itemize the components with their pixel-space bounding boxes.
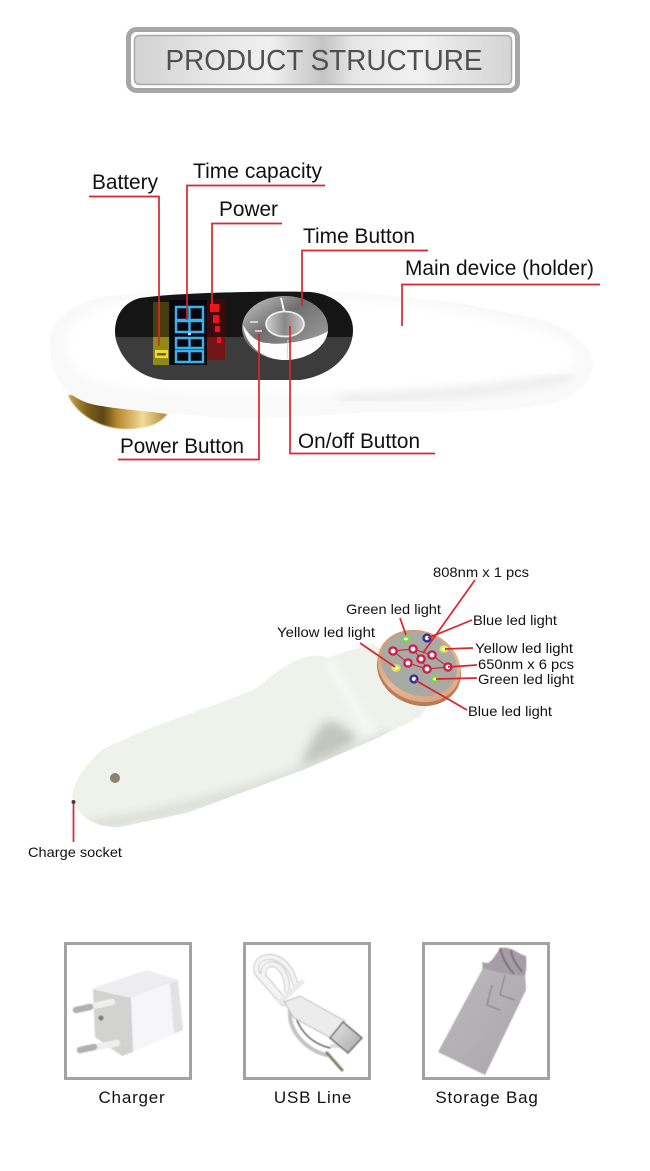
white device body: [72, 374, 573, 414]
leader lines: [74, 580, 477, 842]
label: on/off button: [290, 326, 435, 454]
label: battery: Battery: [92, 171, 158, 194]
green LEDs: [403, 636, 438, 682]
accessory: USB line: [244, 944, 370, 1107]
wiring lines: [393, 649, 448, 669]
lower thin cable and jack: [290, 1010, 346, 1070]
label: time capacity: Time capacity: [193, 160, 322, 183]
time digits: [169, 300, 207, 365]
label: 808nm: 808nm x 1 pcs: [433, 564, 529, 580]
icon: USB cable: [256, 957, 362, 1070]
label: yellow led right: Yellow led light: [475, 640, 573, 656]
red 650nm LEDs: [389, 645, 452, 673]
power level bars: [207, 299, 225, 360]
battery indicator: [153, 302, 169, 365]
charging indicator hole: [110, 773, 120, 783]
label: main device: [402, 257, 600, 326]
label: green led right: Green led light: [478, 671, 574, 687]
device rear view: [72, 618, 472, 827]
labels and leaders: device front view: [89, 160, 600, 460]
blue LEDs: [411, 635, 430, 682]
label: green led top: Green led light: [346, 601, 441, 617]
accessory: storage bag: [424, 944, 548, 1107]
label: time button: Time Button: [303, 225, 415, 248]
labels and leaders: LED head: [28, 564, 574, 860]
label: blue led bottom: Blue led light: [468, 703, 552, 719]
label: main device: Main device (holder): [405, 257, 594, 280]
label: battery: [89, 171, 159, 346]
label: yellow led left: Yellow led light: [277, 624, 375, 640]
control dial: [242, 296, 328, 360]
coil of white cable: [256, 957, 302, 1003]
device front view: [50, 288, 593, 429]
label: time button: [302, 225, 428, 306]
label: charge socket: Charge socket: [28, 844, 122, 860]
caption: storage bag: Storage Bag: [435, 1088, 539, 1107]
caption: USB line: USB Line: [274, 1088, 352, 1107]
label: power button: Power Button: [120, 435, 244, 458]
gold applicator head: [68, 395, 168, 429]
label: 650nm: 650nm x 6 pcs: [478, 656, 574, 672]
accessory: charger: [66, 944, 190, 1107]
caption: charger: Charger: [98, 1088, 166, 1107]
icon: charger plug: [76, 970, 183, 1056]
title banner: [128, 30, 518, 90]
label: blue led top: Blue led light: [473, 612, 557, 628]
label: time capacity: [187, 160, 325, 320]
black display panel: [115, 292, 353, 380]
rear body shell: [72, 643, 432, 827]
yellow LEDs: [393, 646, 447, 671]
LED treatment disc: [366, 618, 472, 718]
label: on/off button: On/off Button: [298, 430, 420, 453]
title banner: PRODUCT STRUCTURE: [166, 45, 482, 77]
icon: drawstring bag: [438, 948, 526, 1075]
label: power: [212, 198, 282, 306]
label: power button: [118, 334, 259, 460]
label: power: Power: [219, 198, 278, 221]
charge socket: [72, 800, 76, 804]
